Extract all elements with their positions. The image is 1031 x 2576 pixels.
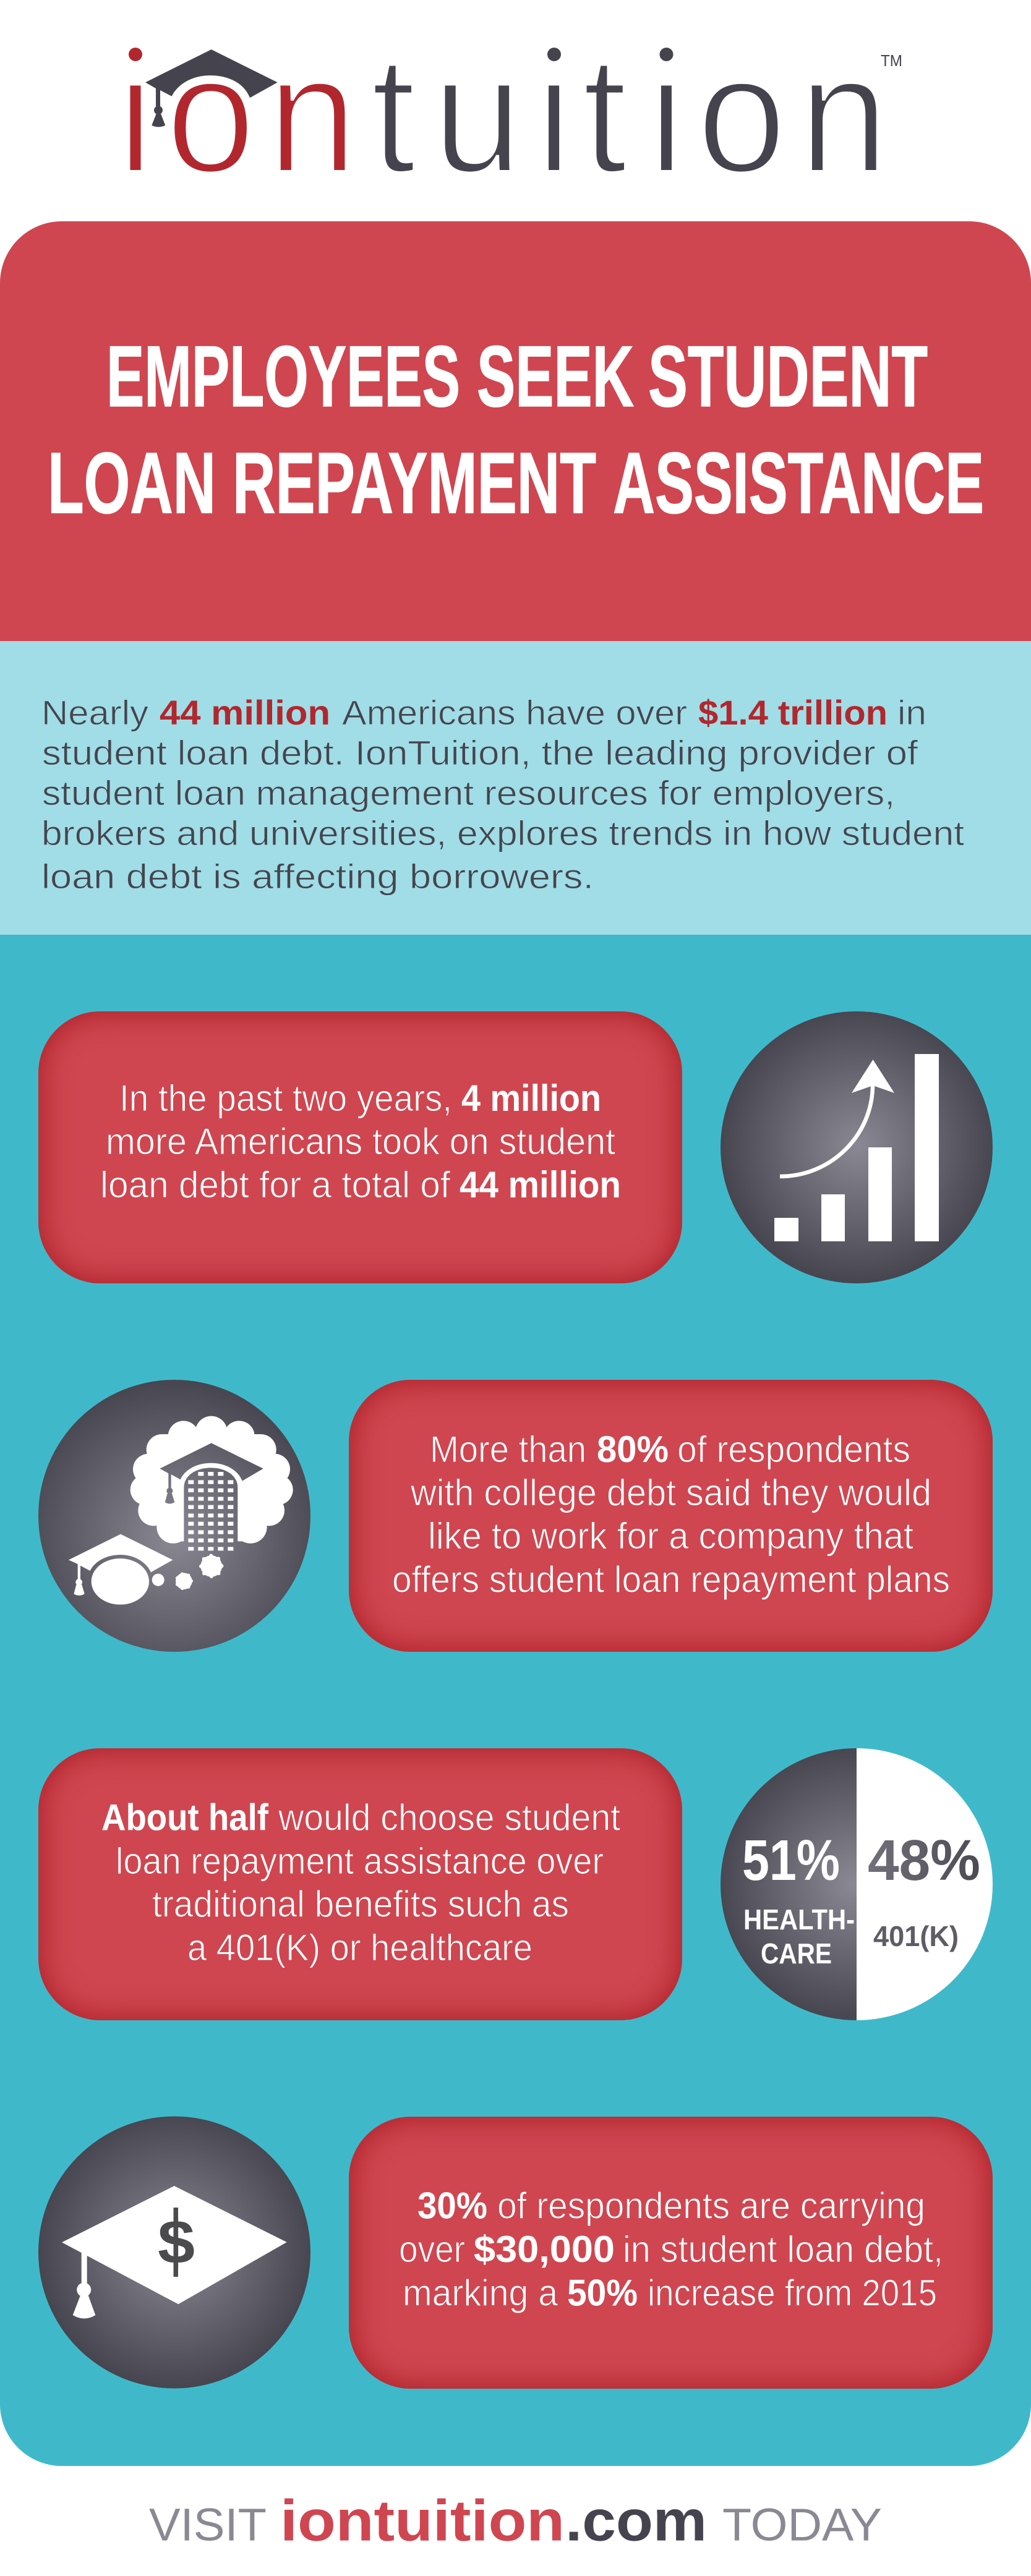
callout text: more Americans took on student	[106, 1121, 615, 1162]
label: 51%: 51%	[742, 1828, 840, 1892]
callout: 4 million more	[38, 1011, 682, 1283]
title	[48, 328, 984, 532]
callout text: increase from 2015	[648, 2272, 937, 2314]
icon: logo graduation cap	[145, 49, 278, 127]
callout: about half	[38, 1748, 682, 2020]
mortarboard	[62, 2186, 287, 2304]
callout text: loan debt for a total of	[100, 1164, 450, 1205]
icon: graduation cap with dollar sign	[38, 2117, 310, 2389]
callout text	[101, 1796, 620, 1968]
intro text: student loan debt. IonTuition, the leading provider of	[42, 733, 918, 772]
callout: 80% of respondents	[349, 1380, 993, 1652]
callout text: 80%	[597, 1429, 669, 1470]
panel: teal body	[0, 935, 1031, 2466]
icon: graduate dreaming of an office building	[38, 1380, 310, 1652]
intro text: Nearly	[41, 693, 148, 732]
callout text: traditional benefits such as	[152, 1884, 569, 1925]
intro text: 44 million	[160, 693, 330, 732]
callout text: like to work for a company that	[428, 1515, 913, 1557]
callout text: loan repayment assistance over	[116, 1840, 604, 1882]
VISIT: VISIT	[149, 2499, 267, 2551]
trademark: TM	[881, 51, 902, 70]
label: 401(k): 401(K)	[873, 1920, 959, 1952]
callout text	[392, 1429, 950, 1600]
tassel	[73, 2250, 95, 2318]
dollar sign: $	[158, 2208, 195, 2277]
callout text: offers student loan repayment plans	[392, 1559, 950, 1600]
label: healthcare	[743, 1903, 855, 1970]
logo lettering	[118, 21, 888, 208]
intro text	[41, 693, 964, 896]
arrow	[780, 1060, 894, 1176]
intro text: student loan management resources for employers,	[42, 773, 895, 812]
TODAY: TODAY	[722, 2499, 882, 2551]
.com: .com	[565, 2488, 707, 2553]
callout: 30% carrying over $30,000	[349, 2117, 993, 2389]
title: SEEK	[477, 328, 634, 425]
thought puffs	[152, 1555, 222, 1589]
footer: call to action	[149, 2488, 882, 2553]
pie chart: 51% healthcare, 48% 401(k)	[721, 1748, 993, 2020]
callout text: About half	[101, 1796, 269, 1838]
logo: iontuition	[118, 21, 902, 208]
graduate head and cap	[69, 1534, 173, 1605]
icon: rising bar chart with arrow	[721, 1011, 993, 1283]
callout text: 44 million	[460, 1164, 621, 1205]
callout text: $30,000	[474, 2229, 615, 2270]
thought cloud	[130, 1416, 293, 1544]
panel: red header	[0, 221, 1031, 641]
callout text: 30%	[417, 2185, 487, 2227]
windows	[188, 1472, 233, 1550]
intro text: brokers and universities, explores trends in how student	[41, 814, 964, 852]
slice: 401(k)	[857, 1748, 993, 2020]
callout text: with college debt said they would	[410, 1472, 931, 1513]
callout text: a 401(K) or healthcare	[187, 1927, 533, 1968]
bars	[774, 1054, 939, 1241]
intro text: Americans have over	[342, 693, 687, 732]
callout text: 4 million	[461, 1078, 601, 1119]
logo lettering: tuition	[371, 21, 888, 208]
title: LOAN	[48, 434, 216, 532]
label: healthcare: HEALTH-	[743, 1903, 855, 1936]
cap cut-out	[160, 1443, 263, 1503]
callout text: of respondents are carrying	[497, 2185, 925, 2227]
callout text: 50%	[567, 2272, 638, 2314]
intro text: loan debt is affecting borrowers.	[41, 857, 594, 896]
callout text	[399, 2185, 943, 2314]
label: 48%: 48%	[868, 1828, 980, 1892]
callout text: in student loan debt,	[623, 2229, 943, 2270]
intro text: $1.4 trillion	[698, 693, 888, 732]
title: EMPLOYEES	[106, 328, 460, 425]
building	[184, 1468, 237, 1550]
label: healthcare: CARE	[761, 1937, 832, 1970]
callout text: More than	[430, 1429, 586, 1470]
callout text	[100, 1078, 621, 1205]
callout text: marking a	[403, 2272, 558, 2314]
callout text: In the past two years,	[119, 1078, 452, 1119]
slice: healthcare	[721, 1748, 857, 2020]
intro text: in	[897, 693, 926, 732]
callout text: of respondents	[677, 1429, 910, 1470]
iontuition: iontuition	[280, 2488, 565, 2553]
callout text: would choose student	[278, 1796, 620, 1838]
panel: introduction	[0, 641, 1031, 935]
logo lettering: ion	[118, 21, 357, 208]
callout text: over	[399, 2229, 465, 2270]
title: REPAYMENT	[233, 434, 596, 532]
